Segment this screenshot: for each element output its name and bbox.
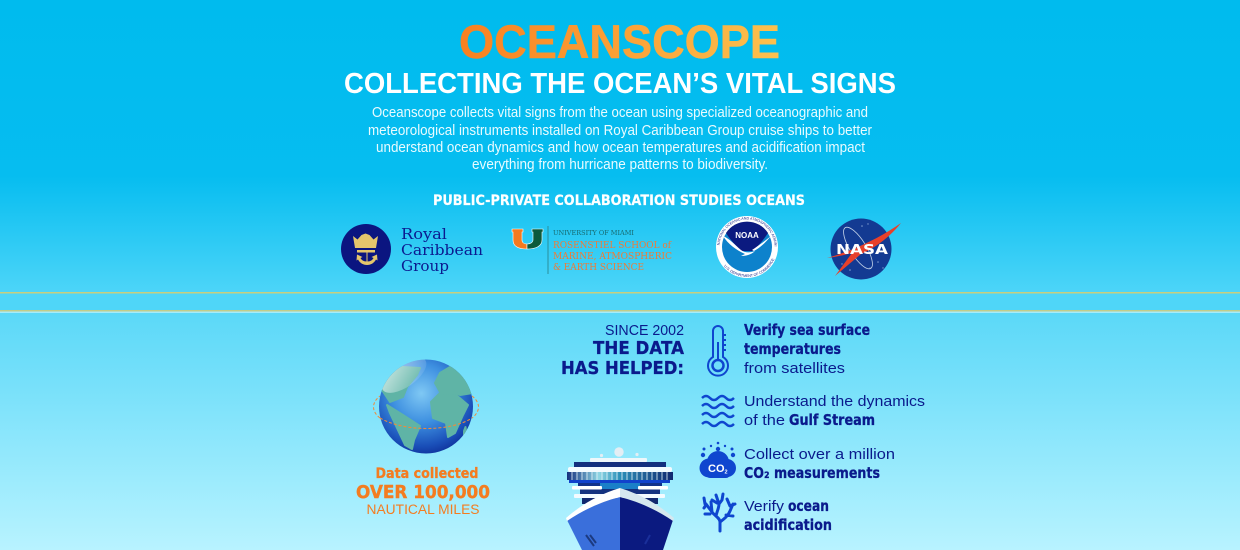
since 2002 heading: THE DATA	[593, 338, 684, 359]
text: CO2 measurements: Collect over a million	[744, 447, 895, 463]
logo: NOAA	[716, 216, 778, 278]
logo: University of Miami	[512, 226, 672, 274]
icon: coral	[704, 494, 735, 531]
subtitle: COLLECTING THE OCEAN’S VITAL SIGNS	[344, 68, 896, 100]
logo: NOAA: NATIONAL OCEANIC AND ATMOSPHERIC ADMINISTRATION	[717, 217, 777, 246]
logo: NASA: NASA	[836, 243, 888, 258]
text: ocean acidification: ocean	[788, 497, 829, 515]
text: gulf stream: Gulf Stream	[789, 411, 875, 429]
text: sea surface temperatures	[744, 321, 870, 377]
since 2002 heading: SINCE 2002	[605, 323, 684, 339]
data collected stat: NAUTICAL MILES	[366, 502, 480, 517]
logo: NOAA: NOAA	[735, 231, 759, 240]
logo: NASA	[827, 218, 901, 280]
text: CO2 measurements: CO₂ measurements	[744, 464, 880, 482]
text: sea surface temperatures: temperatures	[744, 340, 841, 358]
text: sea surface temperatures: Verify sea surface	[744, 321, 870, 339]
icon: CO2 cloud: 2	[724, 470, 728, 476]
text: ocean acidification: acidification	[744, 516, 832, 534]
logo: Royal Caribbean Group: Royal	[401, 225, 447, 243]
icon: CO2 cloud	[700, 442, 736, 478]
intro paragraph: meteorological instruments installed on Royal Caribbean Group cruise ships to better	[368, 123, 872, 139]
icon: waves	[702, 396, 734, 426]
logo: University of Miami: MARINE, ATMOSPHERIC	[553, 251, 672, 262]
logo: Royal Caribbean Group: Group	[401, 257, 449, 275]
icon: thermometer	[708, 326, 728, 376]
text: gulf stream: Understand the dynamics	[744, 394, 925, 410]
intro paragraph: Oceanscope collects vital signs from the ocean using specialized oceanographic and	[372, 105, 868, 121]
logo: NOAA: U.S. DEPARTMENT OF COMMERCE	[724, 258, 774, 277]
since 2002 heading: HAS HELPED:	[561, 358, 684, 379]
data collected stat	[356, 466, 490, 517]
intro paragraph	[368, 105, 872, 173]
logo: University of Miami: & EARTH SCIENCE	[553, 262, 644, 273]
data collected stat: OVER 100,000	[356, 482, 490, 503]
logo: Royal Caribbean Group	[341, 224, 483, 275]
logo: University of Miami: UNIVERSITY OF MIAMI	[553, 229, 634, 237]
text: sea surface temperatures: from satellites	[744, 361, 845, 377]
intro paragraph: everything from hurricane patterns to biodiversity.	[472, 157, 768, 173]
text: CO2 measurements	[744, 447, 895, 482]
ship illustration	[566, 447, 674, 550]
text: ocean acidification: Verify	[744, 499, 785, 515]
collaboration heading: PUBLIC-PRIVATE COLLABORATION STUDIES OCEANS	[433, 193, 805, 209]
globe illustration	[374, 350, 478, 454]
text: ocean acidification	[744, 497, 832, 534]
data collected stat: Data collected	[376, 466, 478, 482]
title: OCEANSCOPE	[459, 15, 780, 68]
logo: University of Miami: ROSENSTIEL SCHOOL of	[553, 240, 672, 251]
logo: Royal Caribbean Group: Caribbean	[401, 241, 483, 259]
text: gulf stream: of the	[744, 413, 785, 429]
intro paragraph: understand ocean dynamics and how ocean temperatures and acidification impact	[376, 140, 865, 156]
since 2002 heading	[561, 323, 684, 379]
icon: CO2 cloud: CO	[708, 463, 724, 475]
text: gulf stream	[744, 394, 925, 429]
